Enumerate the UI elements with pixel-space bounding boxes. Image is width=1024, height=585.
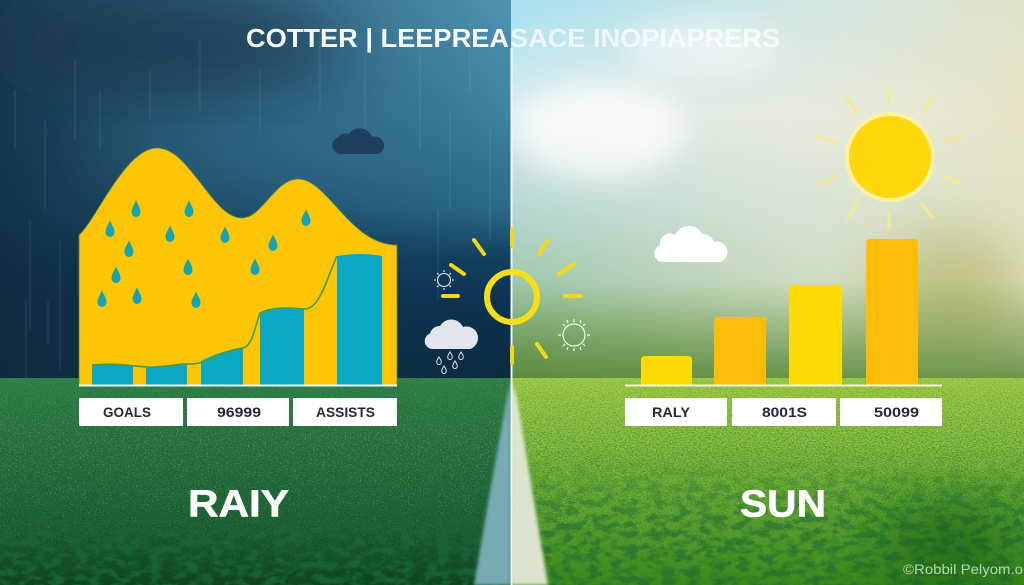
baseline <box>625 384 942 386</box>
label: rain: RAIY <box>188 484 289 526</box>
table: rain labels: ASSISTS <box>316 404 375 420</box>
table: sun labels <box>625 398 942 426</box>
bar three <box>789 285 842 385</box>
panel: sun bar chart <box>625 239 942 386</box>
title: COTTER | LEEPREA <box>246 23 509 53</box>
icon: large sun <box>817 87 960 228</box>
table: rain labels <box>79 398 397 426</box>
bar two <box>714 317 766 385</box>
rain drops <box>98 200 310 308</box>
icon: dark cloud <box>332 128 384 154</box>
trend line <box>92 256 337 367</box>
table: sun labels: 8001S <box>762 404 807 420</box>
title <box>246 23 780 53</box>
copyright credit: ©Robbil Pelyom.o <box>903 561 1023 577</box>
table: sun labels: RALY <box>652 404 691 420</box>
rain streaks <box>15 20 490 380</box>
pitch line left <box>474 380 511 585</box>
yellow mountain area <box>79 148 397 385</box>
teal bars <box>92 254 382 385</box>
bar one <box>641 356 692 385</box>
panel: sunny background <box>511 0 1024 585</box>
panel: rain area chart <box>79 148 397 386</box>
title: SACE INOPIAPRERS <box>510 23 780 53</box>
bar four <box>866 239 918 385</box>
pitch line right <box>511 380 548 585</box>
table: sun labels: 50099 <box>874 404 919 420</box>
label: sun: SUN <box>740 484 826 526</box>
icon: rain cloud <box>425 320 478 374</box>
icon: split sun <box>443 229 581 363</box>
icon: small sun left <box>434 270 454 290</box>
icon: white cloud <box>654 226 727 262</box>
table: rain labels: 96999 <box>217 404 261 420</box>
table: rain labels: GOALS <box>103 404 151 420</box>
center divider <box>510 48 512 585</box>
baseline <box>79 384 397 386</box>
icon: small sun right <box>558 319 590 351</box>
panel: rainy background <box>0 0 511 585</box>
